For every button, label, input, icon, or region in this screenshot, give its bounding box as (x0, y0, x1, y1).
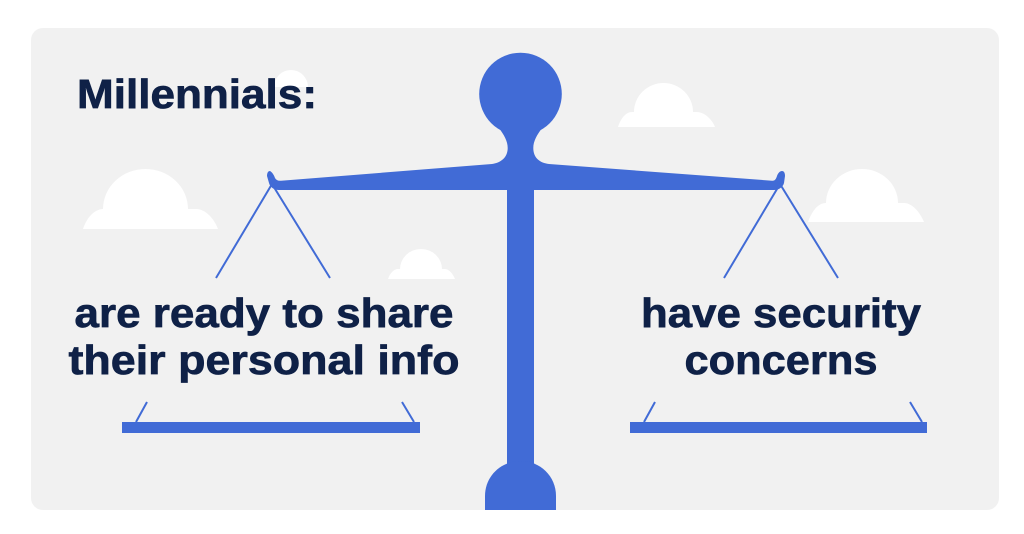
scale beam (267, 128, 785, 190)
text: right pan label: concerns (684, 337, 878, 383)
scale base (485, 461, 556, 510)
icon: cloud right (808, 169, 924, 222)
icon: cloud middle small (388, 249, 455, 279)
right pan strings (644, 184, 922, 422)
left pan strings (136, 184, 414, 422)
left pan (122, 422, 420, 433)
icon: cloud top small (274, 70, 308, 87)
text: right pan label: have security (641, 290, 921, 336)
scale column and head (507, 180, 534, 466)
text: left pan label: their personal info (68, 337, 460, 383)
title: Millennials: (77, 71, 317, 117)
icon: balance scale (122, 53, 927, 510)
text: left pan label: are ready to share (74, 290, 454, 336)
text: left pan label (68, 290, 460, 383)
right pan (630, 422, 927, 433)
text: right pan label (641, 290, 921, 383)
icon: cloud top right (618, 83, 715, 127)
icon: cloud left (83, 169, 218, 229)
